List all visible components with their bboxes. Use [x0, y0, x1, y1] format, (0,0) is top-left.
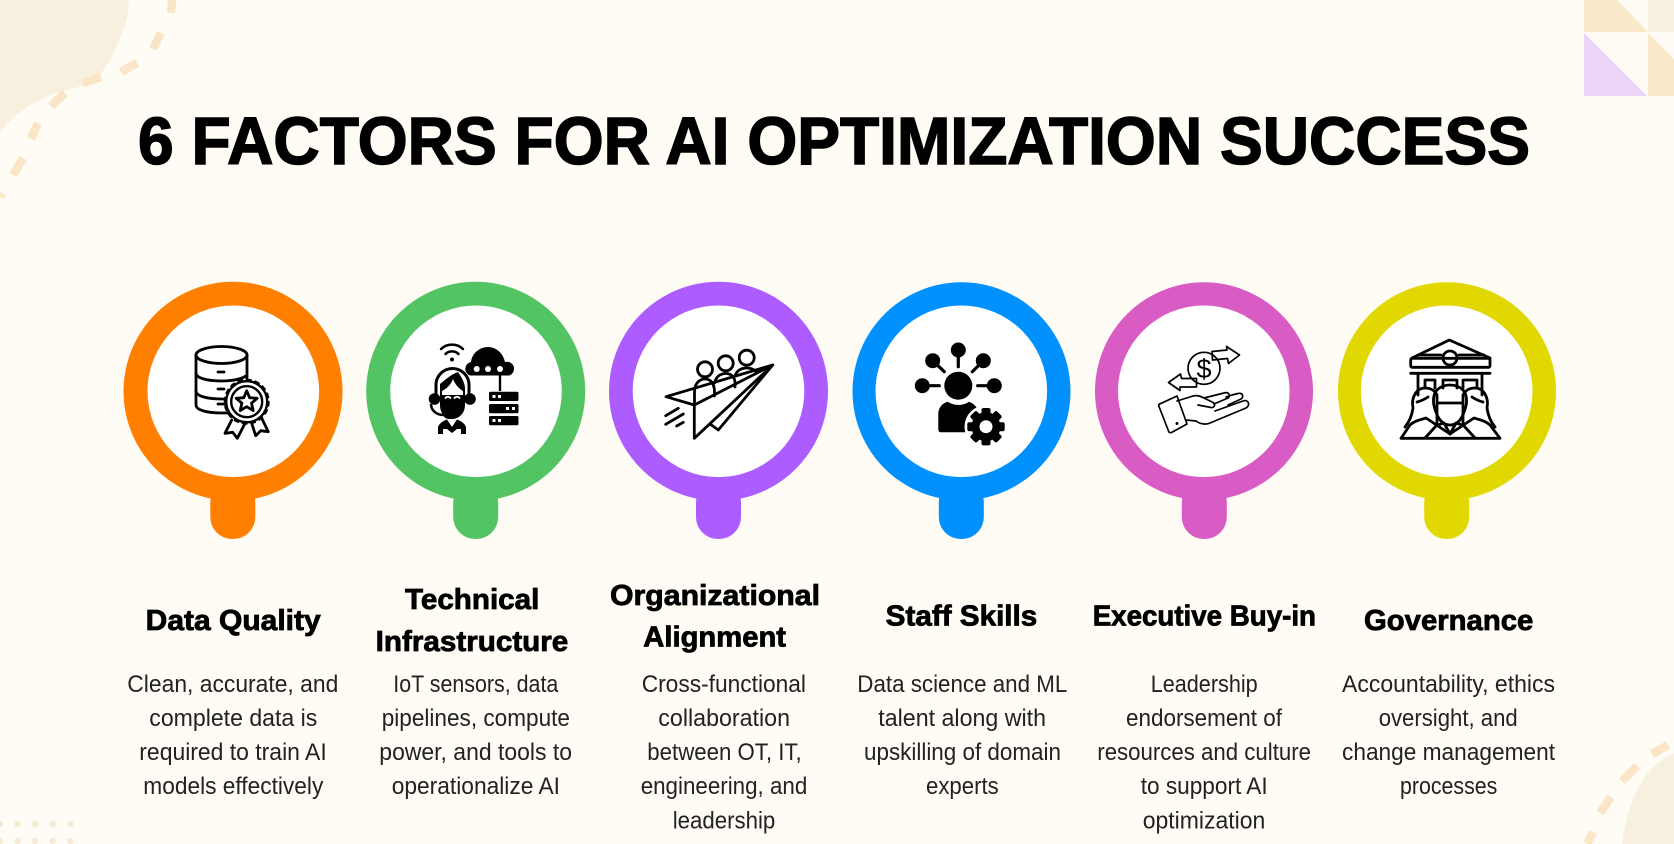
pin: yellow ring — [1338, 282, 1556, 539]
description: Data Quality: required to train AI — [139, 739, 327, 766]
icon: hand with dollar coin and arrows: $ — [1196, 354, 1212, 384]
description: Governance: Accountability, ethics — [1342, 671, 1555, 698]
heading: Governance: Governance — [1364, 605, 1533, 637]
heading: Organizational Alignment — [610, 580, 820, 654]
description: Data Quality: complete data is — [149, 705, 317, 732]
description: Technical Infrastructure: IoT sensors, data — [393, 671, 559, 698]
description: Data Quality — [127, 671, 338, 800]
description: Staff Skills: upskilling of domain — [864, 739, 1061, 766]
description: Governance: change management — [1342, 739, 1555, 766]
description: Organizational Alignment — [641, 671, 807, 834]
decoration: top-right triangles — [1584, 0, 1674, 96]
icon: team on paper plane — [666, 350, 773, 438]
pin: orange ring — [124, 282, 342, 539]
description: Data Quality: models effectively — [143, 773, 323, 800]
description: Technical Infrastructure: operationalize AI — [392, 773, 560, 800]
description: Executive Buy-in: resources and culture — [1097, 739, 1311, 766]
description: Staff Skills — [857, 671, 1067, 800]
description: Governance: processes — [1400, 773, 1497, 800]
icon: database with award badge — [196, 346, 269, 438]
description: Staff Skills: experts — [926, 773, 999, 800]
heading: Technical Infrastructure — [376, 584, 568, 658]
icon: support agent, cloud and server — [429, 345, 518, 434]
heading: Executive Buy-in: Executive Buy-in — [1093, 600, 1316, 632]
pin: blue ring — [852, 282, 1070, 539]
heading: Organizational Alignment: Alignment — [643, 622, 786, 654]
description: Executive Buy-in: optimization — [1143, 808, 1265, 834]
description: Organizational Alignment: collaboration — [658, 705, 790, 732]
description: Organizational Alignment: Cross-functional — [642, 671, 806, 698]
title: 6 FACTORS FOR AI OPTIMIZATION SUCCESS — [138, 104, 1530, 179]
panel: staff skills — [852, 282, 1070, 800]
description: Organizational Alignment: between OT, IT, — [647, 739, 802, 766]
panel: technical infrastructure — [366, 282, 585, 800]
panel: organizational alignment — [609, 282, 828, 834]
description: Staff Skills: talent along with — [878, 705, 1046, 732]
description: Governance — [1342, 671, 1555, 800]
description: Organizational Alignment: leadership — [673, 808, 775, 834]
description: Data Quality: Clean, accurate, and — [127, 671, 338, 698]
heading: Technical Infrastructure: Infrastructure — [376, 626, 568, 658]
decoration: bottom-right blob and dashes — [1587, 745, 1674, 844]
panel: data quality — [124, 282, 342, 800]
description: Staff Skills: Data science and ML — [857, 671, 1067, 698]
description: Executive Buy-in — [1097, 671, 1311, 834]
description: Technical Infrastructure: power, and tools to — [379, 739, 572, 766]
decoration: top-left blob and dashes — [0, 0, 172, 197]
heading: Staff Skills: Staff Skills — [886, 600, 1037, 632]
icon: government building with people — [1401, 340, 1500, 438]
heading: Data Quality: Data Quality — [146, 605, 321, 637]
panel: executive buy-in — [1093, 282, 1316, 834]
heading: Technical Infrastructure: Technical — [405, 584, 539, 616]
description: Organizational Alignment: engineering, and — [641, 773, 807, 800]
description: Executive Buy-in: endorsement of — [1126, 705, 1282, 732]
description: Governance: oversight, and — [1379, 705, 1518, 732]
description: Technical Infrastructure — [379, 671, 572, 800]
icon: hand with dollar coin and arrows — [1159, 346, 1249, 433]
description: Executive Buy-in: to support AI — [1141, 773, 1268, 800]
pin: green ring — [366, 282, 585, 539]
pin: purple ring — [609, 282, 828, 539]
decoration: bottom-left dots — [0, 821, 74, 844]
pin: magenta ring — [1095, 282, 1313, 539]
heading: Organizational Alignment: Organizational — [610, 580, 820, 612]
icon: person with skills and gear — [915, 342, 1008, 448]
description: Technical Infrastructure: pipelines, compute — [382, 705, 570, 732]
description: Executive Buy-in: Leadership — [1151, 671, 1258, 698]
panel: governance — [1338, 282, 1556, 800]
